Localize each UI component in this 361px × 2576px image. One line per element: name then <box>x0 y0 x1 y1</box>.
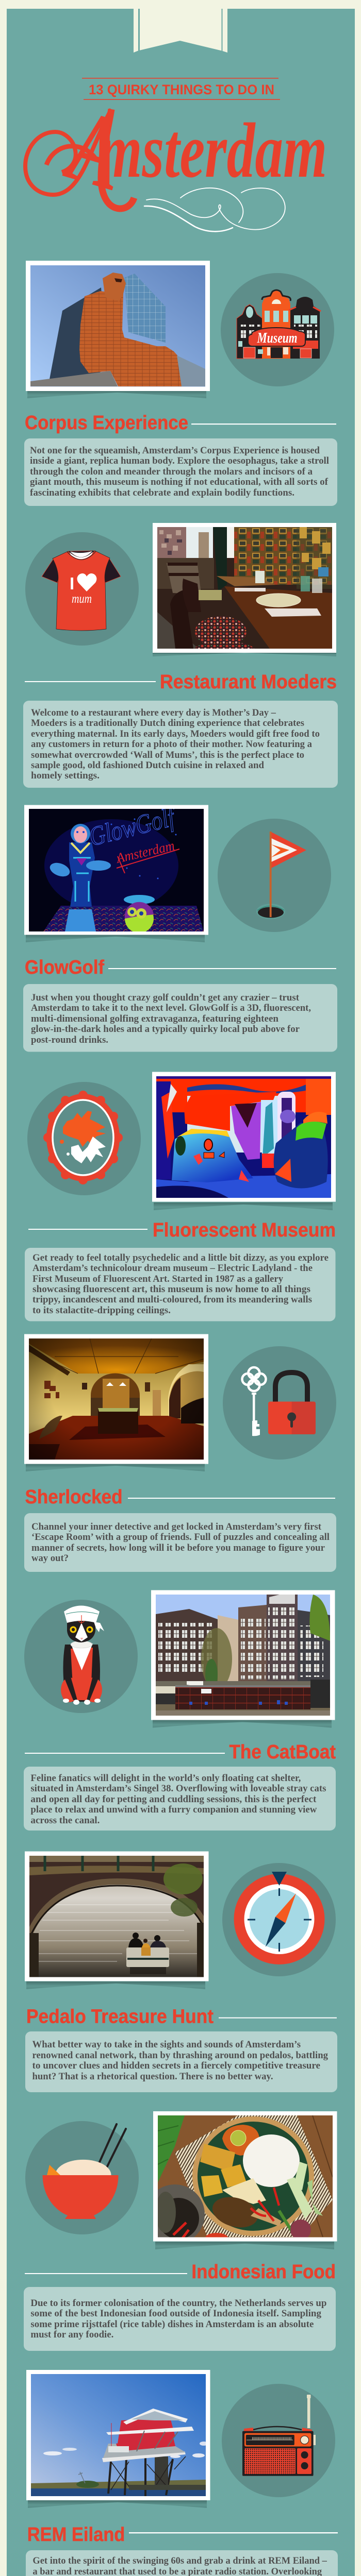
icon: I love mum t-shirt: mum <box>72 592 92 606</box>
heading: Corpus Experience: Corpus Experience <box>25 412 188 434</box>
text block: Restaurant Moeders: everything maternal. In its early days, Moeders would gift free food to <box>31 728 320 739</box>
text block: Restaurant Moeders: Moeders is a traditionally Dutch dining experience that celebrates <box>31 718 304 728</box>
title <box>25 78 327 231</box>
heading: Fluorescent Museum: Fluorescent Museum <box>153 1219 336 1241</box>
text block: Fluorescent Museum <box>25 1248 335 1321</box>
icon: I love mum t-shirt <box>25 532 139 646</box>
text block: Fluorescent Museum: First Museum of Fluorescent Art. Started in 1987 as a gallery <box>32 1274 283 1284</box>
text block: GlowGolf: Amsterdam to take it to the next level. GlowGolf is a 3D, fluorescent, <box>31 1003 311 1013</box>
section: The CatBoat <box>24 1590 336 1831</box>
text block: Sherlocked: manner of secrets, how long will it be before you manage to figure your <box>31 1543 325 1553</box>
text block: Restaurant Moeders: homely settings. <box>31 770 100 781</box>
section: Corpus Experience <box>24 261 337 506</box>
text block: Sherlocked: ‘Escape Room’ with a group of friends. Full of puzzles and concealing all <box>31 1532 330 1543</box>
photo: CatBoat <box>151 1590 335 1728</box>
text block: The CatBoat: and open all day for petting and cuddling sessions, this is the perfect <box>30 1794 317 1805</box>
icon: key and padlock <box>223 1346 336 1460</box>
photo: Restaurant Moeders interior <box>153 523 336 658</box>
text block: Pedalo Treasure Hunt: What better way to take in the sights and sounds of Amsterdam’s <box>32 2039 301 2050</box>
text block: Restaurant Moeders: sample good, old fashioned Dutch cuisine in relaxed and <box>31 760 264 771</box>
text block: Pedalo Treasure Hunt: hunt? That is a rhetorical question. There is no better way. <box>32 2071 273 2082</box>
photo: Indonesian food <box>145 2111 337 2249</box>
text block: REM Eiland <box>26 2550 338 2576</box>
text block: The CatBoat: across the canal. <box>30 1815 100 1826</box>
section: Indonesian Food <box>24 2111 337 2351</box>
text block: The CatBoat: situated in Amsterdam’s Singel 38. Overflowing with loveable stray cats <box>30 1783 326 1794</box>
text block: Restaurant Moeders: somewhat overcrowded ‘Wall of Mums’, this is the perfect place to <box>31 750 304 760</box>
text block: GlowGolf: Just when you thought crazy golf couldn’t get any crazier – trust <box>31 992 300 1003</box>
section: GlowGolf <box>23 802 337 1052</box>
text block: REM Eiland: Get into the spirit of the swinging 60s and grab a drink at REM Eiland – <box>32 2555 327 2566</box>
icon: golf flag <box>218 819 331 932</box>
text block: Fluorescent Museum: Get ready to feel totally psychedelic and a little bit dizzy, as you explore <box>32 1252 329 1263</box>
photo: canal bridge <box>25 1852 208 1989</box>
heading: REM Eiland: REM Eiland <box>27 2524 125 2546</box>
text block: GlowGolf <box>23 984 337 1052</box>
text block: Restaurant Moeders <box>23 701 338 788</box>
text block: Pedalo Treasure Hunt <box>25 2031 337 2092</box>
heading: Pedalo Treasure Hunt: Pedalo Treasure Hunt <box>26 2006 214 2028</box>
text block: Fluorescent Museum: to its stalactite-dripping ceilings. <box>32 1305 171 1316</box>
title: Amsterdam script: Amsterdam <box>58 83 327 214</box>
icon: compass <box>222 1863 336 1976</box>
text block: Corpus Experience: fascinating exhibits that celebrate and explain bodily functions. <box>30 487 294 498</box>
text block: Indonesian Food: must for any foodie. <box>30 2329 113 2340</box>
text block: Pedalo Treasure Hunt: to uncover clues and hidden secrets in a fiercely competitive treasure <box>32 2060 320 2071</box>
icon: museum houses <box>221 273 334 386</box>
text block: Corpus Experience: giant mouth, this museum is nothing if not educational, with all sorts of <box>30 477 329 487</box>
text block: Sherlocked: way out? <box>31 1553 69 1564</box>
text block: GlowGolf: post-round drinks. <box>31 1035 108 1045</box>
text block: Corpus Experience: Not one for the squeamish, Amsterdam’s Corpus Experience is housed <box>30 445 320 456</box>
icon: I love mum t-shirt: I <box>70 574 74 593</box>
photo: Electric Ladyland <box>152 1072 336 1210</box>
subtitle: 13 quirky things: 13 QUIRKY THINGS TO DO IN <box>89 82 274 97</box>
text block: Sherlocked <box>24 1513 336 1572</box>
photo: REM Eiland <box>26 2370 210 2508</box>
text block: Corpus Experience: inside a giant, replica human body. Explore the oesophagus, take a stroll <box>30 455 329 466</box>
text block: Sherlocked: Channel your inner detective and get locked in Amsterdam’s very first <box>31 1521 322 1532</box>
section: Restaurant Moeders <box>23 523 338 788</box>
text block: The CatBoat <box>24 1767 336 1831</box>
text block: GlowGolf: glow-in-the-dark holes and a typically quirky local pub above for <box>31 1024 300 1035</box>
flourish <box>144 188 285 231</box>
text block: The CatBoat: Feline fanatics will delight in the world’s only floating cat shelter, <box>30 1773 301 1784</box>
heading: The CatBoat: The CatBoat <box>229 1741 336 1763</box>
photo: Corpus building <box>26 261 210 398</box>
text block: Corpus Experience <box>24 438 337 506</box>
text block: Fluorescent Museum: trippy, incandescent and multi-coloured, from its meandering walls <box>32 1294 312 1305</box>
text block: Indonesian Food: Due to its former colonisation of the country, the Netherlands serves up <box>30 2298 326 2309</box>
icon: museum houses: Museum <box>257 330 298 346</box>
text block: Indonesian Food <box>24 2287 336 2351</box>
photo: GlowGolf <box>24 802 208 942</box>
photo: GlowGolf: Amsterdam <box>114 838 176 866</box>
text block: Restaurant Moeders: any customers in return for a photo of their mother. Now featuring a <box>31 739 312 750</box>
text block: Restaurant Moeders: Welcome to a restaurant where every day is Mother’s Day – <box>31 707 276 718</box>
heading: Indonesian Food: Indonesian Food <box>191 2261 336 2283</box>
text block: Indonesian Food: some of the best Indonesian food outside of Indonesia itself. Sampling <box>30 2308 321 2319</box>
text block: Corpus Experience: through the colon and meander through the molars and incisors of a <box>30 466 313 477</box>
text block: Fluorescent Museum: Amsterdam’s technicolour dream museum – Electric Ladyland - the <box>32 1263 313 1274</box>
section: Fluorescent Museum <box>25 1072 336 1321</box>
photo: Sherlocked room <box>24 1334 208 1471</box>
section: REM Eiland <box>26 2370 338 2576</box>
icon: radio <box>222 2384 335 2497</box>
heading: GlowGolf: GlowGolf <box>25 957 104 978</box>
text block: GlowGolf: multi-dimensional golfing extravaganza, featuring eighteen <box>31 1013 278 1024</box>
heading: Restaurant Moeders: Restaurant Moeders <box>160 671 337 693</box>
section: Sherlocked <box>24 1334 336 1572</box>
icon: paint splat badge <box>27 1082 141 1195</box>
icon: sailor cat <box>24 1600 138 1713</box>
text block: Indonesian Food: some prime rijsttafel (rice table) dishes in Amsterdam is an absolute <box>30 2319 314 2330</box>
text block: The CatBoat: place to relax and unwind with a furry companion and stunning view <box>30 1804 317 1815</box>
text block: Fluorescent Museum: showcasing fluorescent art, this museum is now home to all things <box>32 1284 310 1295</box>
text block: Pedalo Treasure Hunt: renowned canal network, than by thrashing around on pedalos, battling <box>32 2050 328 2061</box>
heading: Sherlocked: Sherlocked <box>25 1486 123 1508</box>
icon: rice bowl <box>25 2121 139 2234</box>
section: Pedalo Treasure Hunt <box>25 1852 337 2092</box>
ribbon <box>134 9 227 53</box>
